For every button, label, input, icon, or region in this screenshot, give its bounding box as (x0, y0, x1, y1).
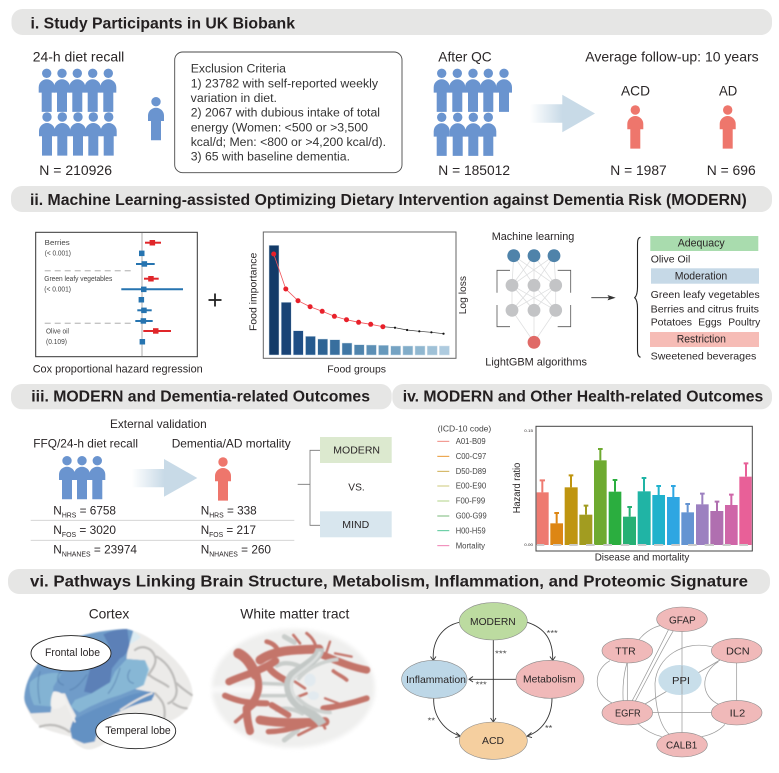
panel: other health outcomes (392, 384, 772, 563)
foods: moderation list: Berries and citrus fruits (651, 303, 759, 315)
legend: ICD-10 codes: F00-F99 (456, 497, 486, 506)
panel: MODERN development (11, 186, 772, 376)
food: olive oil: Olive Oil (651, 253, 690, 265)
arrow: validation (132, 459, 197, 497)
illustration: white matter tract brain (212, 629, 375, 748)
legend: ICD-10 codes: A01-B09 (456, 437, 486, 446)
chart: forest plot: Olive oil (46, 328, 69, 335)
arrow: to MODERN components (591, 295, 616, 300)
outcome: ACD: ACD (621, 82, 650, 98)
category: adequacy (650, 236, 758, 251)
chart: forest plot: (< 0.001) (45, 251, 71, 258)
label: external validation: External validation (110, 417, 207, 431)
outcome: ACD: N = 1987 (610, 162, 667, 178)
exclusion criteria box: 2) 2067 with dubious intake of total (191, 106, 380, 120)
brace (635, 237, 640, 357)
table: cohort sizes: = 260 (238, 543, 271, 557)
diagram: mediation pathway: Metabolism (523, 674, 576, 686)
heading: section vi (8, 569, 770, 594)
foods: moderation list (651, 289, 761, 329)
exclusion criteria box: 1) 23782 with self-reported weekly (191, 76, 379, 90)
count: N = 210926: N = 210926 (39, 162, 112, 178)
table: cohort sizes: = 23974 (91, 543, 137, 557)
panel: study participants (12, 9, 772, 178)
illustration: cortex brain (24, 629, 193, 749)
label: white matter tract: White matter tract (240, 606, 349, 622)
food: sweetened beverages: Sweetened beverages (651, 351, 756, 363)
table: cohort sizes: = 6758 (76, 503, 116, 517)
callout: temporal lobe (96, 713, 176, 749)
heading: section iv: iv. MODERN and Other Health-related Outcomes (403, 389, 763, 406)
table: cohort sizes: = 217 (223, 523, 256, 537)
category: restriction: Restriction (677, 333, 726, 345)
legend: ICD-10 codes (437, 425, 492, 550)
table: cohort sizes: NHANES (209, 552, 238, 559)
axis label: food importance: Food importance (248, 253, 260, 331)
diagram: protein interaction network: PPI (672, 675, 690, 687)
diagram: mediation pathway: ** (545, 724, 552, 733)
diagram: mediation pathway: ** (428, 716, 435, 726)
diagram: protein interaction network: GFAP (669, 614, 696, 626)
table: cohort sizes (31, 503, 294, 559)
diagram: neural network (497, 249, 571, 349)
legend: ICD-10 codes: Mortality (456, 541, 485, 550)
label: cortex: Cortex (89, 606, 129, 622)
diagram: protein interaction network (597, 607, 762, 757)
chart: hazard ratio bars (524, 426, 752, 551)
arrow: follow-up (530, 95, 595, 132)
comparison: MODERN vs MIND (298, 437, 392, 537)
exclusion criteria box: variation in diet. (191, 91, 277, 105)
exclusion criteria box: kcal/d; Men: <800 or >4,200 kcal/d). (191, 135, 386, 149)
icon: three people (59, 456, 105, 499)
category: moderation: Moderation (675, 270, 727, 282)
label: LightGBM: LightGBM algorithms (485, 357, 587, 369)
legend: ICD-10 codes: H00-H59 (456, 526, 486, 535)
heading: section ii: ii. Machine Learning-assisted Optimizing Dietary Intervention against Dementia Risk (MODERN) (30, 192, 747, 209)
icon: group of people after QC (434, 69, 512, 156)
icon: plus sign (208, 294, 222, 306)
exclusion criteria box (175, 52, 402, 173)
diagram: mediation pathway: ACD (482, 735, 504, 747)
comparison: MODERN vs MIND: MODERN (333, 445, 380, 457)
diagram: protein interaction network: IL2 (730, 708, 745, 720)
legend: ICD-10 codes: (ICD-10 code) (438, 425, 492, 434)
panel: dementia outcomes (11, 384, 392, 559)
heading: section i (12, 9, 772, 35)
foods: moderation list: Potatoes (651, 317, 692, 329)
foods: moderation list: Green leafy vegetables (651, 289, 760, 301)
callout: temporal lobe: Temperal lobe (105, 725, 171, 737)
heading: section vi: vi. Pathways Linking Brain Structure, Metabolism, Inflammation, and Proteomic Signature (30, 574, 748, 591)
callout: frontal lobe (31, 636, 111, 671)
callout: frontal lobe: Frontal lobe (45, 647, 100, 659)
table: cohort sizes: HRS (209, 512, 224, 519)
chart: hazard ratio bars: 0.15 (524, 429, 533, 433)
label: After QC: After QC (438, 48, 492, 64)
axis label: disease and mortality: Disease and mortality (595, 551, 690, 563)
chart: forest plot: (0.109) (46, 339, 67, 346)
caption: Cox regression: Cox proportional hazard regression (33, 364, 203, 376)
label: FFQ recall: FFQ/24-h diet recall (33, 437, 138, 451)
count: N = 185012: N = 185012 (438, 162, 510, 178)
table: cohort sizes: HRS (62, 512, 77, 519)
legend: ICD-10 codes: G00-G99 (456, 512, 487, 521)
diagram: protein interaction network: TTR (615, 646, 636, 658)
diagram: protein interaction network: DCN (726, 646, 750, 658)
label: average follow-up: Average follow-up: 10 years (585, 48, 759, 64)
category: restriction (650, 332, 759, 347)
heading: section i: i. Study Participants in UK Biobank (30, 15, 295, 32)
chart: forest plot: Berries (45, 240, 70, 247)
panel: pathways (8, 569, 770, 759)
category: moderation (651, 268, 759, 284)
table: cohort sizes: FOS (62, 532, 76, 539)
legend: ICD-10 codes: D50-D89 (456, 467, 487, 476)
icon: red person (215, 457, 231, 501)
label: mortality: Dementia/AD mortality (172, 437, 291, 451)
diagram: mediation pathway (402, 603, 584, 759)
diagram: mediation pathway: MODERN (470, 616, 516, 628)
diagram: protein interaction network: CALB1 (666, 740, 697, 752)
heading: section ii (11, 186, 772, 212)
diagram: protein interaction network: EGFR (615, 708, 641, 720)
exclusion criteria box: 3) 65 with baseline dementia. (191, 150, 350, 164)
table: cohort sizes: N (53, 543, 62, 557)
chart: food importance bars and log loss line (263, 232, 456, 358)
table: cohort sizes: = 3020 (76, 523, 116, 537)
heading: section iv (392, 384, 772, 409)
axis label: log loss: Log loss (457, 276, 469, 314)
diagram: mediation pathway: *** (476, 680, 487, 690)
table: cohort sizes: FOS (209, 532, 223, 539)
table: cohort sizes: N (201, 503, 209, 517)
legend: ICD-10 codes: E00-E90 (456, 482, 487, 491)
table: cohort sizes: N (53, 523, 62, 537)
axis label: hazard ratio: Hazard ratio (511, 463, 523, 513)
outcome: AD: AD (719, 82, 737, 98)
diagram: mediation pathway: Inflammation (406, 674, 466, 686)
outcome: ACD (610, 82, 667, 178)
category: adequacy: Adequacy (678, 238, 725, 250)
exclusion criteria box: Exclusion Criteria (191, 61, 286, 75)
foods: moderation list: Eggs (698, 317, 722, 329)
chart: hazard ratio bars: 0.00 (524, 543, 533, 547)
outcome: AD: N = 696 (707, 162, 756, 178)
diagram: mediation pathway: *** (547, 629, 558, 638)
table: cohort sizes: NHANES (62, 552, 91, 559)
outcome: AD (707, 82, 756, 178)
comparison: MODERN vs MIND: VS. (348, 481, 365, 493)
diagram: mediation pathway: *** (495, 650, 507, 658)
table: cohort sizes: N (201, 543, 209, 557)
chart: forest plot: Green leafy vegetables (44, 276, 113, 283)
icon: excluded person (148, 97, 164, 140)
icon: group of people, all participants (39, 69, 117, 156)
table: cohort sizes: N (53, 503, 62, 517)
exclusion criteria box: energy (Women: <500 or >3,500 (191, 120, 368, 134)
axis label: food groups: Food groups (327, 364, 386, 376)
table: cohort sizes: N (201, 523, 209, 537)
table: cohort sizes: = 338 (224, 503, 257, 517)
comparison: MODERN vs MIND: MIND (342, 519, 370, 531)
chart: forest plot (36, 232, 197, 357)
heading: section iii (11, 384, 392, 409)
legend: ICD-10 codes: C00-C97 (456, 452, 487, 461)
chart: forest plot: (< 0.001) (44, 287, 71, 294)
label: machine learning: Machine learning (492, 231, 574, 243)
heading: section iii: iii. MODERN and Dementia-related Outcomes (31, 389, 370, 406)
foods: moderation list: Poultry (728, 317, 761, 329)
label: 24-h diet recall: 24-h diet recall (33, 48, 124, 64)
